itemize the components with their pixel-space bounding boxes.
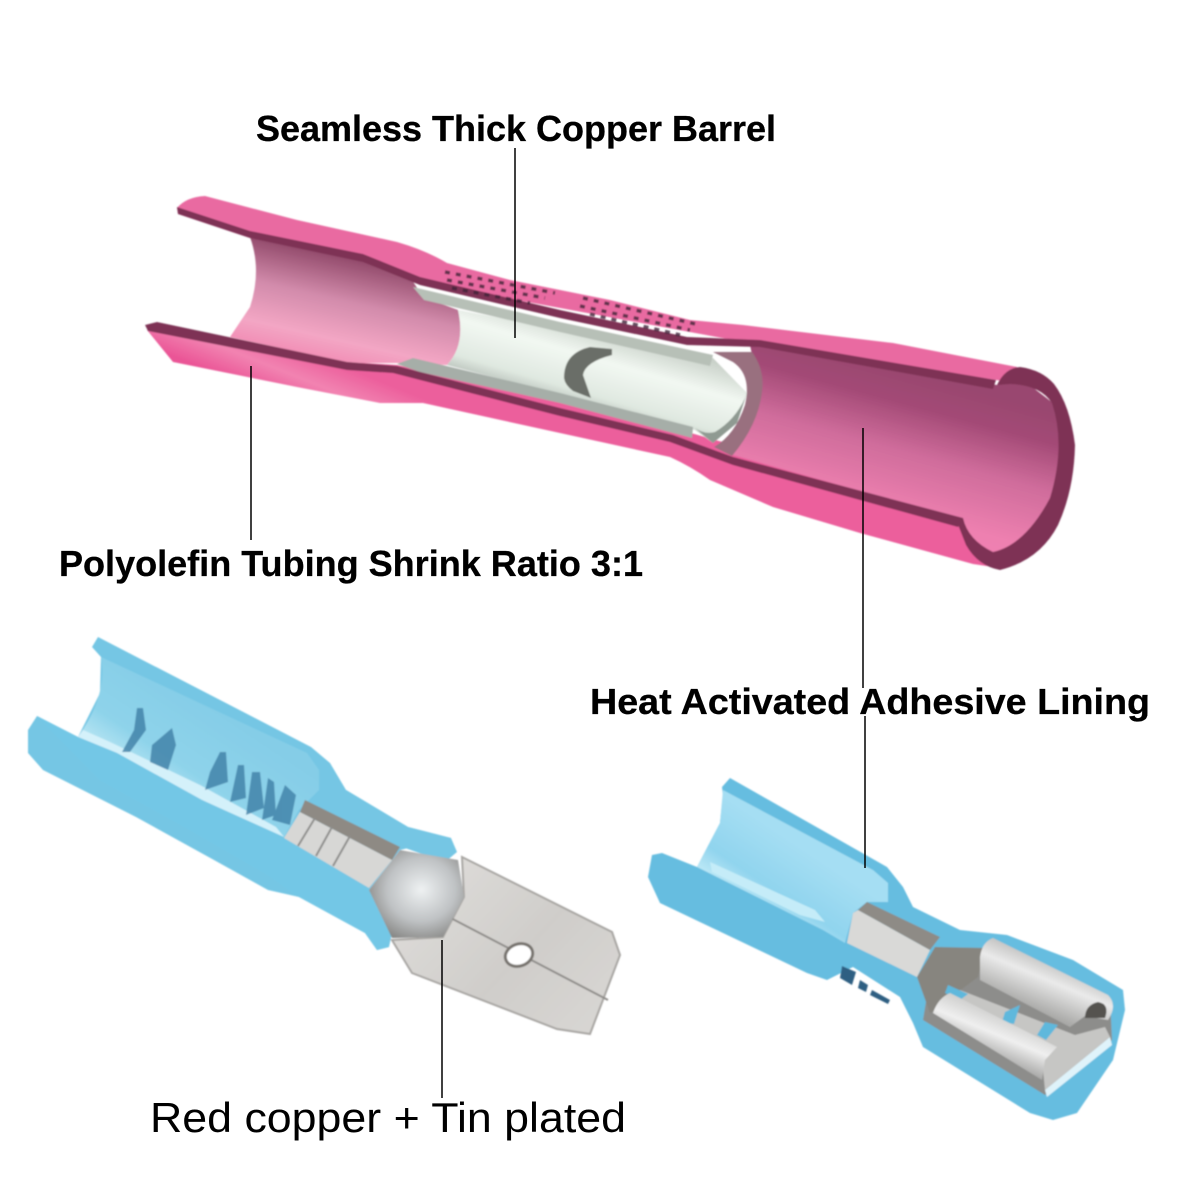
upper roll [980, 938, 1113, 1027]
callout line: tin plated [441, 940, 443, 1098]
rim of right mouth [957, 367, 1075, 570]
label: red copper tin plated: Red copper + Tin plated [150, 1094, 626, 1141]
lower dark cut wall [145, 322, 963, 527]
barrel [447, 310, 747, 443]
callout line: polyolefin [250, 366, 252, 540]
female blue spade terminal [648, 778, 1125, 1120]
pink butt connector [145, 196, 1075, 570]
sleeve interior [78, 657, 319, 837]
right interior [733, 345, 1062, 553]
upper outer wall [177, 196, 1030, 385]
barrel end shading [695, 393, 747, 443]
sleeve outer [28, 637, 451, 950]
label: polyolefin tubing: Polyolefin Tubing Shrink Ratio 3:1 [59, 543, 643, 584]
label: adhesive lining: Heat Activated Adhesive Lining [590, 681, 1150, 722]
left interior [230, 237, 460, 365]
lower roll [933, 993, 1057, 1080]
printed marking [122, 708, 296, 825]
crimp front [847, 910, 930, 977]
roll opening [1085, 1002, 1106, 1018]
crimp ridges [298, 818, 350, 866]
lower sleeve highlight [37, 716, 389, 950]
blade hole [502, 940, 536, 970]
lower outer wall [147, 325, 1000, 568]
marking [840, 966, 890, 1004]
callout line: adhesive lining lower [864, 716, 866, 868]
interior light streak [710, 862, 825, 922]
female sleeve interior [697, 790, 888, 943]
lower right white edge [1045, 1037, 1112, 1097]
middle plate [957, 990, 1110, 1090]
blue slots [945, 985, 1058, 1040]
upper dark cut wall [177, 207, 996, 389]
crimp top [858, 902, 940, 950]
blade centre line [445, 915, 608, 1000]
barrel upper lip [413, 287, 713, 366]
barrel dimple [564, 347, 612, 398]
barrel lower lip [397, 358, 693, 438]
right upper lip [320, 790, 457, 862]
callout line: adhesive lining [862, 428, 864, 688]
crimp barrel top [300, 800, 400, 860]
label: copper barrel: Seamless Thick Copper Barrel [256, 108, 776, 149]
barrel end ring [713, 352, 763, 456]
cup [369, 850, 464, 938]
female sleeve body [648, 778, 1125, 1120]
callout line: copper barrel [514, 148, 516, 338]
printed dots [445, 272, 700, 335]
female mouth interior [923, 947, 1112, 1095]
light band [78, 730, 284, 837]
blade [392, 857, 620, 1034]
crimp barrel front [284, 812, 392, 888]
male blue spade terminal [28, 637, 620, 1034]
base metal [917, 947, 985, 1013]
